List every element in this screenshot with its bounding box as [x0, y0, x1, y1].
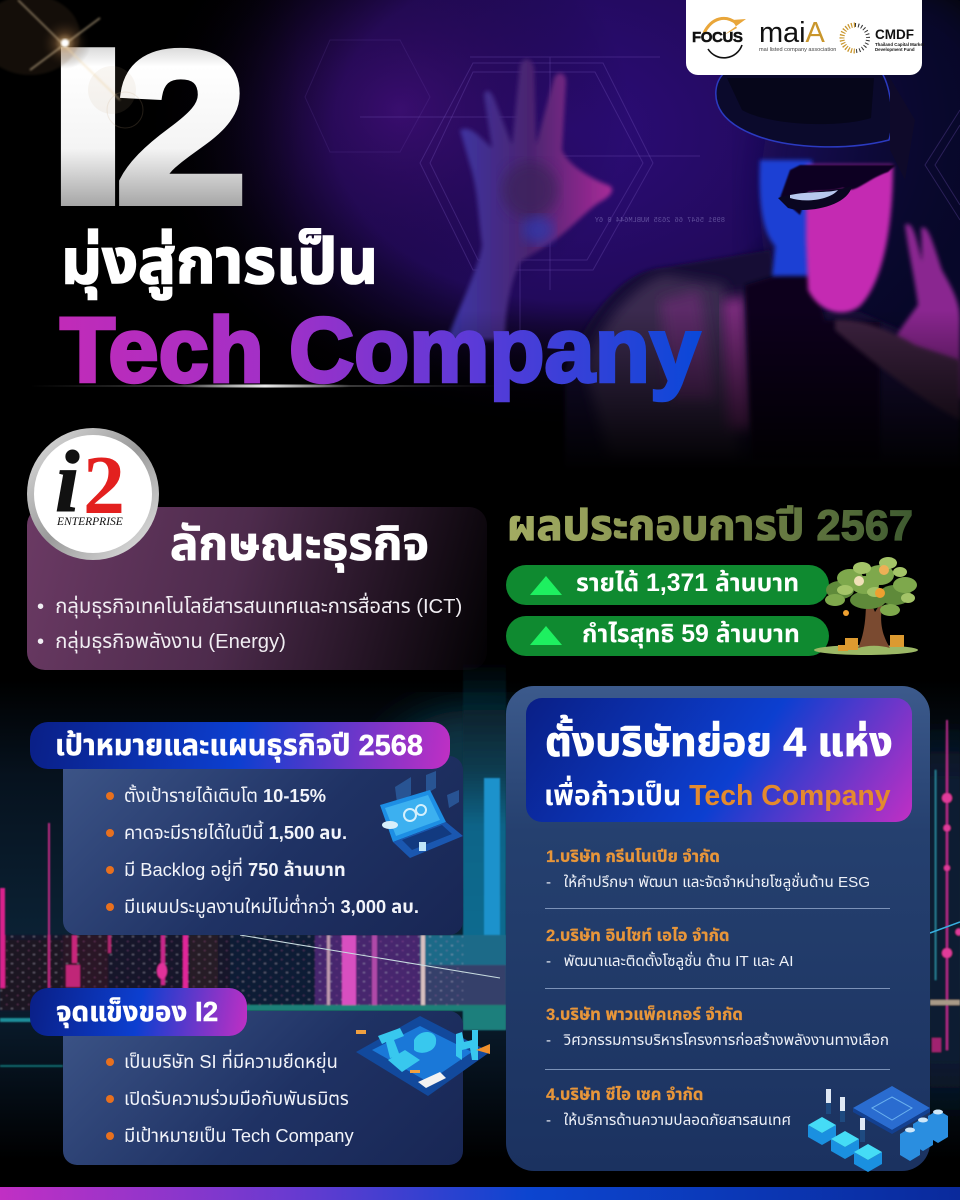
icon: money tree — [814, 557, 918, 655]
goals list: คาดจะมีรายได้ในปีนี้ 1,500 ลบ. — [124, 822, 347, 843]
heading pill: goals — [30, 722, 450, 769]
title: tech company: Tech Company — [60, 300, 700, 402]
logo: CMDF: CMDF — [875, 27, 914, 42]
pill: revenue — [506, 565, 829, 605]
bullets: • กลุ่มธุรกิจเทคโนโลยีสารสนเทศและการสื่อสาร (ICT) — [37, 596, 462, 618]
goals list — [106, 784, 419, 918]
strengths list: มีเป้าหมายเป็น Tech Company — [124, 1125, 354, 1146]
title: thai line: มุ่งสู่การเป็น — [61, 227, 378, 297]
panel: subsidiaries — [506, 686, 930, 1171]
pill: profit — [506, 616, 829, 656]
logo: i2 enterprise: ENTERPRISE — [57, 516, 123, 528]
logo: maiA: maiA — [759, 17, 825, 49]
logo: maiA: mai listed company association — [759, 47, 836, 53]
logo: mai focus — [692, 16, 746, 59]
company 4: - ให้บริการด้านความปลอดภัยสารสนเทศ — [546, 1112, 791, 1129]
company 3: 3.บริษัท พาวแพ็คเกอร์ จำกัด — [546, 1005, 743, 1024]
company 4 — [546, 1085, 791, 1129]
heading line 2: เพื่อก้าวเป็น Tech Company — [544, 780, 891, 812]
heading: performance: ผลประกอบการปี 2567 — [507, 502, 913, 550]
heading: ลักษณะธุรกิจ — [170, 518, 429, 571]
goals list: มีแผนประมูลงานใหม่ไม่ต่ำกว่า 3,000 ลบ. — [124, 896, 419, 917]
heading box: subsidiaries — [526, 698, 912, 822]
icon: isometric servers — [808, 1086, 948, 1172]
logo: i2 enterprise — [27, 428, 159, 560]
panel: strengths — [63, 1011, 463, 1165]
strengths list: เปิดรับความร่วมมือกับพันธมิตร — [124, 1088, 349, 1109]
top glow — [140, 0, 960, 440]
logo: CMDF — [840, 22, 924, 54]
heading pill: goals: เป้าหมายและแผนธุรกิจปี 2568 — [55, 730, 423, 762]
bottom colour bar — [0, 1187, 960, 1200]
icon: laptop — [380, 771, 463, 858]
company 2: 2.บริษัท อินไซท์ เอไอ จำกัด — [546, 926, 729, 945]
heading pill: strengths: จุดแข็งของ I2 — [56, 996, 218, 1027]
city background — [0, 660, 960, 1160]
lens flare on title — [0, 0, 144, 128]
company 4: 4.บริษัท ซีไอ เซค จำกัด — [546, 1085, 703, 1104]
logo: i2 enterprise: i — [55, 434, 79, 531]
title: I2 — [44, 3, 702, 402]
heading line 1: ตั้งบริษัทย่อย 4 แห่ง — [545, 719, 893, 765]
logo: i2 enterprise: 2 — [83, 439, 125, 532]
strengths list — [106, 1050, 354, 1146]
divider flare — [30, 384, 500, 388]
company 1: - ให้คำปรึกษา พัฒนา และจัดจำหน่ายโซลูชั่นด้าน ESG — [546, 874, 870, 891]
hexagon lines — [305, 40, 960, 340]
icon: tech isometric — [356, 1016, 490, 1096]
company 2: - พัฒนาและติดตั้งโซลูชั่น ด้าน IT และ AI — [546, 953, 793, 970]
heading pill: strengths — [30, 988, 247, 1036]
logo: CMDF: Development Fund — [875, 47, 915, 52]
title: I2: 2 — [115, 7, 247, 248]
bullets: • กลุ่มธุรกิจพลังงาน (Energy) — [37, 631, 286, 653]
company 2 — [546, 926, 793, 970]
company 3 — [546, 1005, 889, 1049]
goals list: ตั้งเป้ารายได้เติบโต 10-15% — [124, 785, 326, 806]
company 1: 1.บริษัท กรีนโนเปีย จำกัด — [546, 847, 720, 866]
panel: business type — [27, 507, 487, 670]
company 3: - วิศวกรรมการบริหารโครงการก่อสร้างพลังงานทางเลือก — [546, 1032, 889, 1049]
goals list: มี Backlog อยู่ที่ 750 ล้านบาท — [124, 859, 346, 880]
title: I2: I — [44, 3, 132, 251]
pill: revenue: รายได้ 1,371 ล้านบาท — [576, 570, 799, 597]
hand: right — [835, 224, 960, 420]
logo card — [686, 0, 922, 75]
hand: left — [447, 59, 612, 340]
strengths list: เป็นบริษัท SI ที่มีความยืดหยุ่น — [124, 1051, 338, 1072]
bullets — [37, 592, 462, 654]
panel: goals — [63, 756, 463, 935]
person — [447, 59, 960, 470]
logo: CMDF: Thailand Capital Market — [875, 42, 924, 47]
company 1 — [546, 847, 870, 891]
hud text: 8991 5647 66 2635 NUBLM644 0 6Y — [594, 217, 725, 225]
logo: mai focus: FOCUS — [692, 29, 743, 46]
pill: profit: กำไรสุทธิ 59 ล้านบาท — [582, 621, 800, 648]
